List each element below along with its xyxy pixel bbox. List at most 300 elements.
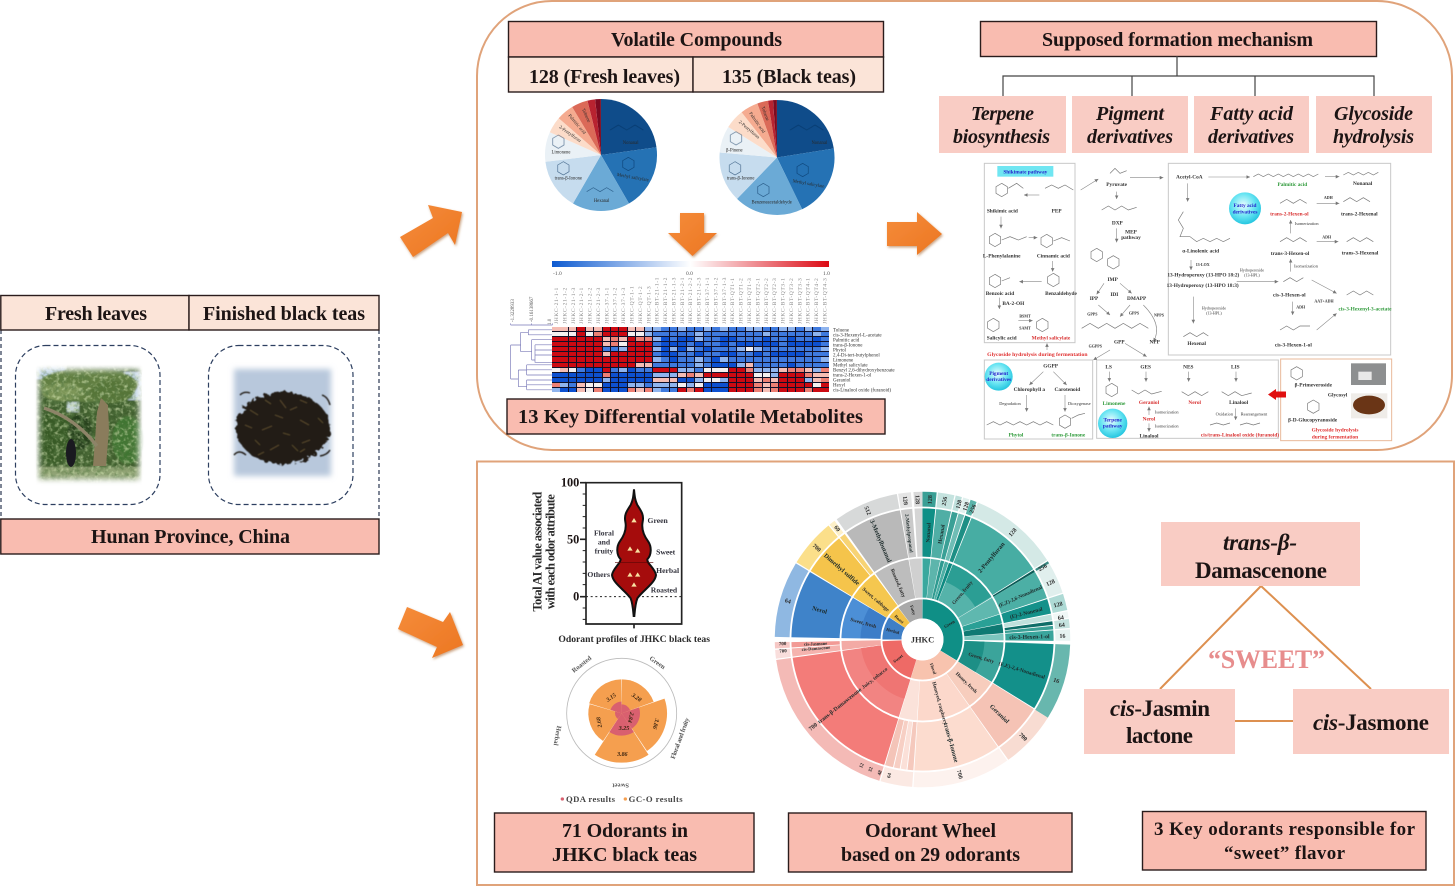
- colour scale: -1.0: [553, 271, 562, 277]
- connector tree: [1003, 56, 1374, 96]
- wheel odorant labels: 2-Pentylfuran: [977, 541, 1007, 575]
- mechanism category: fatty acid derivatives: derivatives: [1208, 126, 1294, 148]
- label: Hunan Province, China: Hunan Province, China: [91, 526, 290, 548]
- y axis title: Total AI value associated: [531, 492, 545, 612]
- pie labels and structures: Methyl salicylate: [616, 173, 649, 183]
- wheel odorant labels: cis-3-Hexen-1-ol: [1009, 634, 1050, 641]
- wheel outer values: 128: [962, 501, 971, 512]
- pathway labels: pigment and terpene: Linalool: [1229, 400, 1249, 406]
- pathway labels: MEP: GPPS: [1129, 310, 1140, 315]
- violin labels: Green: [648, 516, 669, 525]
- label: 71 odorants: JHKC black teas: [552, 844, 697, 866]
- heatmap column labels: JHKC-BT-21-1-3: [672, 277, 678, 324]
- pathway labels: pigment and terpene: GGPP: [1043, 364, 1059, 370]
- wheel outer values: 48: [878, 769, 884, 776]
- node: trans-beta-damascenone: Damascenone: [1195, 558, 1327, 583]
- pathway labels: shikimate: L-Phenylalanine: [983, 253, 1021, 259]
- label: odorant wheel: [788, 813, 1072, 872]
- heatmap row labels: trans-β-Ionone: [833, 344, 863, 348]
- pathway labels: glycoside hydrolysis with photos: β-D-Glucopyranoside: [1288, 418, 1338, 424]
- icon: terpene pathway bubble: Terpene: [1103, 418, 1123, 424]
- heatmap row labels: trans-2-Hexen-1-ol: [833, 374, 872, 378]
- heatmap row labels: cis-Linalool oxide (furanoid): [833, 388, 891, 394]
- heatmap column labels: JHKC-21-2-2: [588, 287, 594, 324]
- mechanism category: terpene biosynthesis: biosynthesis: [953, 126, 1050, 148]
- icon: fatty acid derivatives bubble: Fatty acid: [1234, 203, 1257, 209]
- pathway labels: shikimate: Shikimic acid: [987, 209, 1018, 215]
- wheel odorant labels: trans-β-Ionone: [942, 722, 959, 763]
- wheel odorant labels: (E,Z)-2,6-Nonadienal: [998, 583, 1044, 609]
- heading: supposed formation mechanism: Supposed formation mechanism: [1042, 29, 1313, 51]
- heatmap panel: [511, 261, 895, 394]
- wheel descriptor labels: Honey, fresh: [954, 671, 978, 695]
- pathway boxes: [984, 163, 1392, 441]
- wheel outer values: 64: [1058, 615, 1064, 622]
- heatmap column labels: JHKC-BT-21-2-2: [688, 277, 694, 324]
- wheel ring separators: [790, 508, 1054, 772]
- header: fresh leaves and finished black teas: Fresh leaves: [45, 303, 147, 325]
- wheel outer values: 16: [1052, 678, 1060, 685]
- pathway labels: pigment and terpene: Phytol: [1009, 433, 1024, 439]
- heatmap column labels: JHKC-QT-1-3: [646, 286, 652, 324]
- pie labels and structures: Palmitic acid: [747, 112, 766, 135]
- polar ring: [567, 658, 677, 768]
- pathway labels: pigment and terpene: Linalool: [1140, 433, 1159, 439]
- polar chart: QDA vs GC-O: [552, 655, 691, 804]
- heatmap column labels: JHKC-BT-21-1-2: [663, 277, 669, 324]
- wheel attribute labels: Floral: [929, 662, 938, 676]
- heatmap row labels: Methyl salicylate: [833, 364, 868, 368]
- wheel odorant labels: (E,E)-2,4-Nonadienal: [998, 660, 1046, 681]
- heatmap column labels: JHKC-21-1-2: [562, 287, 568, 324]
- mechanism category: glycoside hydrolysis: Glycoside: [1334, 103, 1413, 125]
- pathway labels: MEP: Glycoside hydrolysis during fermentation: [987, 352, 1088, 358]
- heatmap column labels: JHKC-BT-QT3-1: [780, 278, 786, 324]
- pathway labels: pigment and terpene: Oxidation: [1216, 412, 1234, 417]
- wheel descriptor shading: [829, 546, 1016, 733]
- label: 3 key odorants: “sweet” flavor: [1224, 843, 1346, 864]
- mechanism category: glycoside hydrolysis: hydrolysis: [1333, 126, 1414, 148]
- wheel outer values: 64: [784, 598, 791, 606]
- heatmap column labels: JHKC-BT-37-1-2: [713, 277, 719, 324]
- y axis labels: 0: [573, 590, 579, 604]
- wheel outer values: 69: [832, 525, 841, 533]
- pathway labels: MEP: IPP: [1090, 296, 1099, 302]
- heatmap column labels: JHKC-BT-QT4-2: [814, 278, 820, 324]
- violin plot: [531, 476, 710, 645]
- pathway labels: MEP: GPPS: [1087, 312, 1098, 317]
- polar values: 3.86: [651, 717, 660, 730]
- pie labels and structures: Hexanal: [594, 199, 610, 204]
- wheel descriptor labels: Sweet, fresh: [849, 617, 877, 630]
- header: fresh leaves and finished black teas: [1, 296, 379, 330]
- pathway labels: pigment and terpene: Limonene: [1103, 401, 1126, 407]
- heatmap row labels: Palmitic acid: [833, 338, 860, 344]
- GC-O sectors: [588, 679, 656, 747]
- heatmap row labels: Phytol: [833, 348, 847, 354]
- wheel outer values: 700: [779, 642, 787, 647]
- icon: terpene pathway bubble: pathway: [1103, 424, 1123, 430]
- photo: tea tree: [36, 365, 144, 485]
- wheel outer values: 128: [1053, 601, 1063, 609]
- pathway labels: fatty acid: ADH: [1296, 304, 1306, 309]
- pathway labels: pigment and terpene: Nerol: [1143, 417, 1156, 423]
- pathway labels: fatty acid: trans-2-Hexenal: [1341, 212, 1378, 218]
- polar values: 3.25: [618, 726, 629, 732]
- pathway labels: pigment and terpene: trans-β-Ionone: [1051, 433, 1086, 439]
- wheel odorant labels: trans-β-Damascenone: [817, 687, 863, 725]
- heatmap column labels: JHKC-21-1-3: [571, 287, 577, 324]
- violin body: [612, 489, 656, 616]
- heatmap column labels: JHKC-BT-QT1-3: [747, 278, 753, 324]
- violin labels: Others: [587, 570, 610, 579]
- pathway labels: pigment and terpene: Isomerization: [1155, 409, 1179, 414]
- wheel outer values: 128: [913, 495, 920, 504]
- wheel descriptor labels: Juicy, tobacco: [861, 666, 889, 691]
- pathway labels: glycoside hydrolysis with photos: β-Primeveroside: [1295, 383, 1333, 389]
- heatmap column labels: JHKC-21-2-1: [579, 287, 585, 324]
- heading: supposed formation mechanism: [980, 22, 1376, 56]
- wheel outer values: 16: [1059, 634, 1066, 640]
- heatmap column labels: JHKC-21-1-1: [554, 287, 560, 324]
- label: 71 odorants: [494, 813, 754, 872]
- heatmap column labels: JHKC-BT-37-1-1: [705, 277, 711, 324]
- pie labels and structures: Nonanal: [811, 141, 828, 146]
- mechanism category: glycoside hydrolysis: [1316, 96, 1432, 153]
- heatmap column labels: JHKC-BT-QT2-2: [764, 278, 770, 324]
- label: odorant wheel: based on 29 odorants: [841, 844, 1020, 866]
- pathway labels: fatty acid: ADH: [1324, 195, 1334, 200]
- polar values: 2.68: [596, 716, 604, 729]
- heatmap column labels: JHKC-BT-QT2-1: [755, 278, 761, 324]
- heatmap row labels: Hexyl: [833, 384, 846, 388]
- polar values: [596, 692, 660, 758]
- wheel outer values: 700: [779, 649, 787, 655]
- caption: odorant profiles: Odorant profiles of JHKC black teas: [558, 634, 710, 645]
- mechanism category: fatty acid derivatives: Fatty acid: [1209, 103, 1294, 125]
- heading: volatile compounds table: 135 (Black teas): [722, 66, 856, 88]
- pathway labels: fatty acid: trans-2-Hexen-ol: [1270, 212, 1309, 218]
- pathway labels: pigment and terpene: Carotenoid: [1055, 387, 1080, 393]
- molecular structures: [987, 168, 1378, 428]
- pathway labels: fatty acid: (13-HPL): [1206, 310, 1222, 315]
- wheel outer values: 128: [1008, 528, 1018, 538]
- pie labels and structures: [552, 106, 828, 205]
- arrow: pies to heatmap: [668, 213, 717, 256]
- node: cis-jasmin lactone: [1084, 689, 1235, 754]
- dendrogram scale labels: [511, 296, 553, 325]
- pathway labels: MEP: DXP: [1112, 221, 1124, 227]
- label: 71 odorants: 71 Odorants in: [562, 820, 688, 842]
- wheel odorant labels: (E)-2-Nonenal: [1009, 606, 1044, 621]
- pathway labels: shikimate: Shikimate pathway: [1003, 169, 1048, 175]
- node: cis-jasmone: [1293, 689, 1449, 754]
- arrow: samples to odorant analysis: [398, 607, 463, 658]
- plot frame and axes: [580, 483, 682, 628]
- colour scale: 1.0: [823, 271, 830, 277]
- pathway labels: fatty acid: trans-3-Hexen-ol: [1271, 251, 1310, 257]
- polar axis labels: [552, 655, 691, 788]
- polar values: 2.84: [626, 710, 635, 723]
- pathway labels: fatty acid: AAT+ADH: [1314, 299, 1335, 304]
- pie labels and structures: Benzeneacetaldehyde: [751, 200, 792, 205]
- pathway labels: fatty acid: Isomerization: [1294, 264, 1319, 269]
- y axis title: [531, 492, 558, 612]
- colour scale: [552, 261, 830, 277]
- heading: volatile compounds table: Volatile Compounds: [611, 29, 782, 51]
- node: trans-beta-damascenone: [1161, 522, 1360, 586]
- label: 3 key odorants: [1142, 812, 1426, 870]
- wheel odorant labels: Nonanal: [926, 522, 933, 543]
- polar values: 3.86: [616, 752, 628, 758]
- wheel descriptor labels: Green, fruity: [951, 580, 975, 606]
- wheel outer values: 64: [1059, 623, 1065, 629]
- wheel attribute labels: Herbal: [886, 627, 900, 635]
- wheel outer values: 128: [956, 499, 964, 510]
- violin labels: [587, 516, 679, 594]
- wheel odorant labels: Geraniol: [988, 703, 1010, 725]
- wheel centre label: JHKC: [911, 634, 934, 644]
- pathway labels: pigment and terpene: LIS: [1231, 364, 1240, 370]
- polar legend: QDA results: [566, 794, 616, 804]
- y axis labels: 50: [567, 532, 579, 546]
- pathway labels: fatty acid: cis-3-Hexenyl-3-acetate: [1339, 307, 1392, 313]
- pathway labels: fatty acid: α-Linolenic acid: [1182, 248, 1219, 254]
- dendrogram: [511, 323, 552, 390]
- wheel outer values: 12: [859, 762, 866, 769]
- triangle connectors: [1160, 586, 1371, 721]
- pathway labels: pigment and terpene: Dioxygenase: [1068, 401, 1091, 406]
- icon: fatty acid derivatives bubble: [1229, 192, 1261, 224]
- icon: terpene pathway bubble: [1098, 409, 1127, 438]
- polar axis labels: Sweet: [612, 781, 629, 788]
- pathway labels: fatty acid: Hydroperoxide: [1202, 305, 1226, 310]
- odorant wheel sunburst: [726, 443, 1119, 836]
- pathway labels: MEP: DMAPP: [1127, 296, 1147, 302]
- wheel attribute labels: Roast: [893, 614, 905, 625]
- pathway labels: fatty acid: ADH: [1322, 234, 1332, 239]
- arrow: volatile data to mechanism: [887, 212, 942, 255]
- wheel odorant labels: cis-Damascone: [801, 645, 830, 652]
- wheel attribute ring: [879, 596, 966, 683]
- mechanism category: pigment derivatives: derivatives: [1087, 126, 1173, 148]
- median and data points: [615, 518, 653, 587]
- heatmap row labels: Geraniol: [833, 378, 851, 384]
- pathway labels: MEP: [987, 182, 1165, 358]
- polar legend: [561, 794, 683, 804]
- icon: pigment derivatives bubble: Pigment: [989, 371, 1008, 377]
- wheel outer values: 700: [808, 722, 819, 733]
- wheel odorant ring: [772, 489, 1073, 790]
- panel: sample origin: [1, 296, 379, 554]
- pie chart: fresh leaves: [561, 115, 641, 195]
- icon: fatty acid derivatives bubble: derivatives: [1233, 209, 1257, 215]
- heatmap column labels: JHKC-37-1-3: [621, 287, 627, 324]
- pathway labels: shikimate: Cinnamic acid: [1037, 253, 1070, 259]
- arrow: samples to volatile analysis: [400, 205, 462, 257]
- heatmap row labels: Benzyl 2,6-dihydroxybenzoate: [833, 368, 895, 374]
- pathway labels: fatty acid: [1167, 175, 1392, 349]
- wheel descriptor labels: Green, fatty: [967, 652, 995, 665]
- wheel odorant labels: 3-Methylbutanal: [868, 519, 892, 564]
- label: 13 key differential volatile metabolites: 13 Key Differential volatile Metabolites: [518, 406, 863, 428]
- label: 3 key odorants: 3 Key odorants responsible for: [1154, 819, 1416, 840]
- icon: pigment derivatives bubble: derivatives: [986, 377, 1011, 383]
- pathway labels: fatty acid: 13-Hydroperoxy (13-HPO 18:3): [1167, 282, 1239, 289]
- pie labels and structures: trans-β-Ionone: [727, 177, 754, 182]
- wheel descriptor labels: [849, 568, 995, 726]
- node: cis-jasmin lactone: cis-Jasmin: [1110, 696, 1210, 721]
- wheel outer values: 32: [868, 766, 875, 773]
- pathway labels: pigment and terpene: LS: [1105, 364, 1112, 370]
- heatmap grid: [552, 327, 829, 392]
- violin labels: Herbal: [656, 566, 679, 575]
- wheel odorant labels: Nerol: [811, 605, 828, 616]
- pathway labels: fatty acid: cis-3-Hexen-ol: [1273, 292, 1306, 298]
- heatmap column labels: JHKC-37-1-2: [613, 287, 619, 324]
- pie labels and structures: Methyl salicylate: [792, 179, 825, 190]
- triangle: key odorants: [1084, 522, 1449, 754]
- arrow: glycoside to terpene: [1268, 389, 1286, 400]
- pathway labels: MEP: NPPS: [1154, 313, 1165, 318]
- heatmap column labels: JHKC-BT-21-2-3: [697, 277, 703, 324]
- pathway labels: shikimate: Salicylic acid: [987, 335, 1017, 341]
- heatmap column labels: [554, 277, 828, 324]
- pathway labels: pigment and terpene: Geraniol: [1139, 400, 1160, 406]
- heatmap row labels: cis-3-Hexenyl-L-acetate: [833, 334, 882, 338]
- wheel odorant labels: 2-Methylpropanal: [903, 514, 913, 554]
- dashed frame: tree photo: [16, 346, 160, 504]
- y axis title: with each odor attribute: [544, 494, 558, 609]
- wheel outer values: [779, 495, 1066, 780]
- heatmap column labels: JHKC-BT-QT1-1: [730, 278, 736, 324]
- heatmap column labels: JHKC-BT-QT2-3: [772, 278, 778, 324]
- pathway labels: fatty acid: Nonanal: [1353, 181, 1373, 187]
- wheel attribute labels: Green: [943, 619, 956, 629]
- pathway labels: MEP: Pyruvate: [1106, 182, 1128, 188]
- pie labels and structures: β-Pinene: [726, 148, 743, 153]
- header: fresh leaves and finished black teas: Finished black teas: [203, 303, 365, 325]
- polar legend: GC-O results: [629, 794, 683, 804]
- icon: pigment derivatives bubble: [985, 363, 1013, 391]
- mechanism category: fatty acid derivatives: [1194, 96, 1309, 153]
- pie labels and structures: 2-Pentylfuran: [737, 120, 761, 141]
- heatmap column labels: JHKC-BT-QT3-3: [797, 278, 803, 324]
- pathway labels: pigment and terpene: Rearrangement: [1241, 412, 1268, 417]
- wheel centre: [902, 618, 944, 660]
- heatmap column labels: JHKC-BT-21-2-1: [680, 277, 686, 324]
- polar axis labels: Green: [648, 655, 667, 671]
- pathway labels: pigment and terpene: cis/trans-Linalool oxide (furanoid): [1201, 432, 1279, 439]
- dendrogram scale labels: 1.0: [548, 318, 553, 325]
- heatmap column labels: JHKC-BT-QT3-2: [789, 278, 795, 324]
- photo: black tea leaves: [234, 369, 331, 476]
- pathway labels: pigment and terpene: [999, 364, 1279, 439]
- heatmap column labels: JHKC-QT-1-1: [630, 286, 636, 324]
- wheel odorant labels: cis-Jasmone: [804, 641, 827, 647]
- violin labels: and: [598, 538, 611, 547]
- pathway labels: shikimate: PEP: [1052, 209, 1062, 215]
- pie labels and structures: Toluene: [760, 106, 769, 122]
- pathway labels: fatty acid: Hexenal: [1187, 341, 1207, 347]
- pathway labels: glycoside hydrolysis with photos: Glycosyl: [1328, 393, 1348, 399]
- heading: volatile compounds table: 128 (Fresh leaves): [529, 66, 680, 88]
- node: cis-jasmin lactone: lactone: [1126, 723, 1193, 748]
- pie labels and structures: Toluene: [580, 108, 591, 124]
- pathway labels: MEP: pathway: [1121, 235, 1141, 241]
- pathway labels: MEP: IDI: [1110, 292, 1118, 298]
- wheel outer ring: [726, 443, 1119, 836]
- node: trans-beta-damascenone: trans-β-: [1223, 530, 1297, 555]
- pathway labels: MEP: MEP: [1125, 229, 1138, 235]
- wheel attribute labels: [886, 604, 956, 676]
- pathway labels: MEP: IMP: [1107, 277, 1119, 283]
- wheel outer values: 700: [1017, 732, 1028, 743]
- polar axis labels: Roasted: [571, 655, 593, 675]
- polar values: 3.28: [629, 692, 642, 704]
- wheel outer values: 128: [928, 495, 934, 504]
- wheel outer values: 256: [969, 504, 978, 514]
- heatmap column labels: JHKC-BT-QT4-1: [806, 278, 812, 324]
- QDA sectors: [606, 698, 637, 729]
- pie labels and structures: 2-Pentylfuran: [558, 125, 582, 144]
- wheel odorant labels: [801, 514, 1050, 763]
- pathway labels: shikimate: BSMT: [1019, 313, 1031, 318]
- pie chart: black teas: [736, 117, 818, 198]
- violin labels: fruity: [595, 546, 614, 555]
- pathway labels: MEP: GPP: [1114, 340, 1125, 346]
- panel: volatile metabolomics: [477, 1, 1452, 450]
- polar values: 3.15: [605, 693, 618, 704]
- violin labels: Floral: [594, 529, 614, 538]
- label: Hunan Province, China: [1, 519, 379, 554]
- pathway labels: fatty acid: Palmitic acid: [1277, 182, 1307, 188]
- polar axis labels: Floral and fruity: [670, 716, 691, 760]
- wheel descriptor labels: Roasted, fatty: [889, 568, 906, 599]
- pathway labels: pigment and terpene: Nerol: [1188, 400, 1201, 406]
- pathway labels: shikimate: [983, 166, 1077, 341]
- mechanism category: pigment derivatives: Pigment: [1095, 103, 1165, 125]
- wheel outer values: 700: [955, 770, 963, 780]
- pathway labels: fatty acid: Acetyl-CoA: [1176, 175, 1203, 181]
- pathway labels: MEP: NPP: [1149, 340, 1161, 346]
- pathway labels: fatty acid: Hydroperoxide: [1240, 268, 1264, 273]
- heatmap column labels: JHKC-BT-21-1-1: [655, 277, 661, 324]
- wheel outer values: 700: [811, 543, 822, 554]
- pathway diagram: [983, 163, 1392, 441]
- y axis labels: [561, 476, 579, 604]
- wheel descriptor labels: Honeyed, raspberry: [930, 681, 948, 726]
- pathway labels: fatty acid: (13-HPL): [1244, 273, 1260, 278]
- polar axis labels: Herbal: [552, 725, 562, 746]
- wheel outer values: 256: [1038, 563, 1048, 573]
- pathway labels: glycoside hydrolysis with photos: [1288, 363, 1387, 440]
- heatmap row labels: 2,4-Di-tert-butylphenol: [833, 354, 880, 358]
- wheel odorant labels: Hexanal: [937, 524, 947, 544]
- mechanism category: pigment derivatives: [1072, 96, 1188, 153]
- pie labels and structures: Palmitic acid: [567, 114, 587, 136]
- heatmap column labels: JHKC-BT-37-1-3: [722, 277, 728, 324]
- wheel outer values: 128: [1045, 579, 1056, 588]
- pathway labels: fatty acid: Isomerization: [1295, 221, 1319, 226]
- wheel odorant labels: Dimethyl sulfide: [822, 552, 861, 587]
- wheel attribute labels: Sweet: [892, 653, 904, 664]
- mechanism category: terpene biosynthesis: Terpene: [971, 103, 1034, 125]
- heatmap column labels: JHKC-37-1-1: [604, 287, 610, 324]
- heatmap row labels: Limonene: [833, 358, 854, 364]
- heatmap column labels: JHKC-BT-QT1-2: [739, 278, 745, 324]
- y axis labels: 100: [561, 476, 579, 490]
